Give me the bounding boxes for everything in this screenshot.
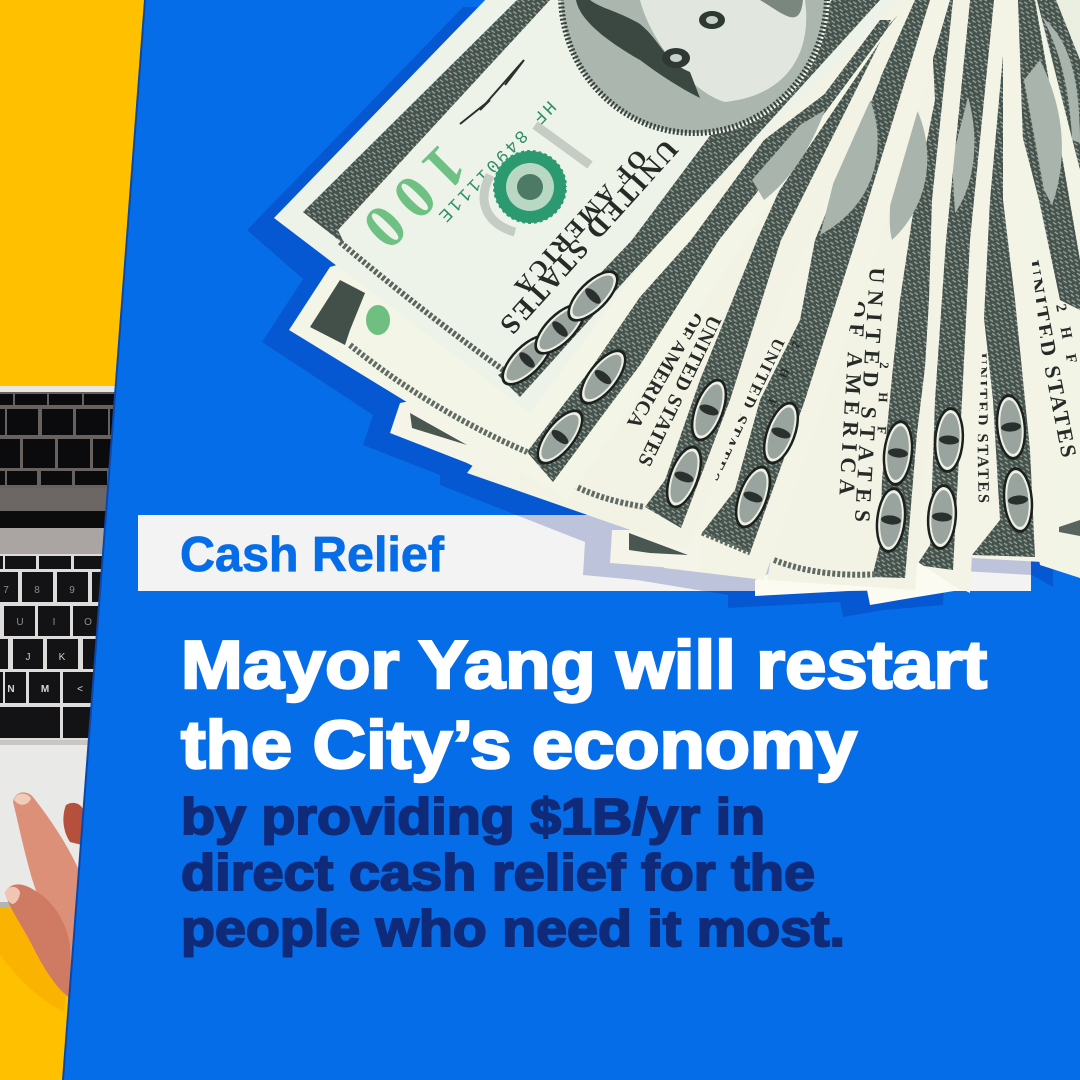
bill I: UNITED STATES bbox=[1019, 258, 1080, 459]
bill C: UNITED STATES bbox=[633, 312, 725, 470]
bill F: OF AMERICA bbox=[834, 300, 871, 496]
main bill top border bbox=[303, 0, 550, 245]
laptop with hand: K bbox=[59, 652, 66, 663]
bill: far right bbox=[1030, 0, 1080, 180]
laptop with hand: J bbox=[26, 652, 30, 663]
bill F bbox=[755, 0, 970, 605]
laptop with hand: 9 bbox=[69, 585, 75, 596]
headline: the City’s economy bbox=[181, 707, 857, 783]
ghost numeral bbox=[484, 125, 590, 232]
bill E bbox=[664, 0, 950, 580]
laptop with hand: M bbox=[41, 684, 49, 695]
serial number: HF 84901111E bbox=[434, 96, 559, 225]
bill H bbox=[950, 0, 1059, 563]
bill E: 2 H F bbox=[764, 339, 804, 409]
bill H: UNITED STATES bbox=[972, 353, 992, 503]
portrait bbox=[558, 0, 830, 136]
bill E: UNITED STATES bbox=[703, 335, 788, 484]
money shadow bbox=[247, 7, 1058, 617]
treasury seal bbox=[493, 150, 567, 224]
money fan bbox=[274, 0, 1080, 605]
laptop with hand: < bbox=[77, 684, 83, 695]
main bill scalloped edge bbox=[340, 242, 506, 372]
laptop with hand: U bbox=[16, 617, 24, 628]
united states lettering: OF AMERICA bbox=[508, 144, 652, 299]
bill F: UNITED STATES bbox=[850, 267, 890, 523]
bill G bbox=[880, 0, 1008, 593]
laptop with hand: O bbox=[84, 617, 92, 628]
laptop with hand: N bbox=[7, 684, 15, 695]
subheadline bbox=[181, 788, 845, 957]
bill I: 2 H F bbox=[1052, 303, 1079, 365]
subheadline: direct cash relief for the bbox=[181, 844, 815, 901]
main bill denomination band bbox=[498, 0, 880, 397]
bill main with portrait bbox=[274, 0, 905, 413]
bill C: OF AMERICA bbox=[622, 308, 707, 432]
bill B bbox=[390, 380, 520, 490]
subheadline: people who need it most. bbox=[181, 900, 845, 957]
laptop with hand: 8 bbox=[34, 585, 40, 596]
headline: Mayor Yang will restart bbox=[181, 627, 987, 703]
signature mark bbox=[460, 60, 524, 124]
bill main with portrait: UNITED STATES bbox=[494, 133, 684, 340]
laptop with hand bbox=[0, 386, 118, 1012]
tag band background bbox=[138, 515, 1031, 591]
bill F: 2 H F bbox=[874, 362, 892, 434]
bill A bbox=[289, 5, 905, 500]
bill C bbox=[467, 0, 915, 550]
subheadline: by providing $1B/yr in bbox=[181, 788, 765, 845]
bill I bbox=[990, 0, 1080, 578]
big 100 numeral: 100 bbox=[350, 132, 479, 262]
bill D bbox=[610, 530, 700, 570]
tag label: Cash Relief: Cash Relief bbox=[180, 528, 445, 582]
headline bbox=[181, 627, 987, 783]
laptop with hand: I bbox=[53, 617, 55, 628]
laptop with hand: 7 bbox=[3, 585, 9, 596]
